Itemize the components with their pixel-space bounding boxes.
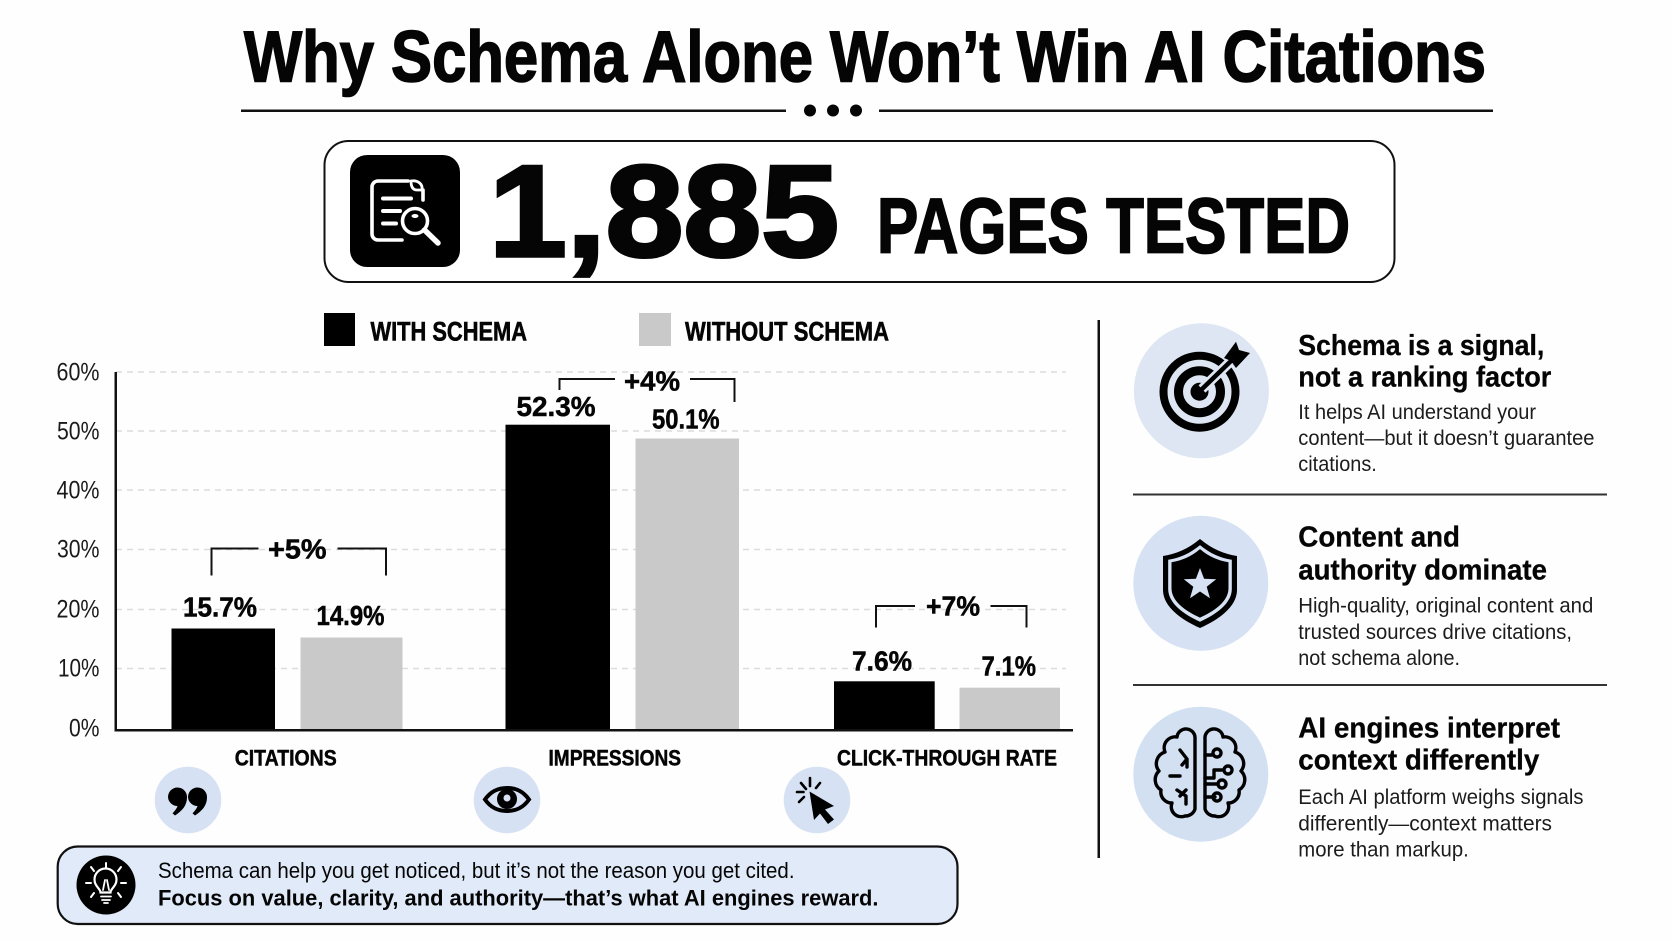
icon: target with arrow [1134,323,1269,458]
group: click-through bars: +7% [926,591,980,622]
takeaway 1: schema is a signal [1134,323,1594,476]
takeaway 2: content and authority: not schema alone. [1298,647,1460,670]
icon: quotation marks [155,767,221,833]
group: citations bars: +5% [268,534,327,564]
callout: takeaway [58,846,957,924]
takeaway 2: content and authority [1133,516,1593,670]
group: click-through bars [834,591,1060,732]
icon: document with magnifier [350,155,460,267]
y axis labels: 10% [58,655,100,683]
icon: eye [474,767,540,833]
takeaway 1: schema is a signal: citations. [1298,453,1377,476]
panel: pages tested banner [324,138,1394,284]
title divider with dots [241,104,1493,116]
icon: brain [1133,707,1268,842]
banner label: PAGES TESTED [877,182,1350,270]
group: citations bars: 14.9% [316,600,385,631]
y axis labels: 60% [56,359,100,387]
chart legend: WITH SCHEMA [370,316,527,346]
big number: 1,885 [489,138,839,284]
category label: click-through rate: CLICK-THROUGH RATE [837,746,1057,770]
panel divider [1098,320,1100,858]
body text: It helps AI understand your [1298,401,1536,424]
heading: Content and [1298,522,1460,554]
icon: cursor click [784,767,850,833]
group: click-through bars: 7.6% [852,646,912,677]
title: Why Schema Alone Won’t Win AI Citations [244,18,1486,98]
body text: Each AI platform weighs signals [1298,786,1584,809]
category label: impressions: IMPRESSIONS [548,746,681,770]
group: citations bars: 15.7% [183,592,257,623]
bar chart [56,359,1073,743]
takeaway 3: ai engines: context differently [1298,744,1539,776]
group: impressions bars: 50.1% [652,403,720,434]
takeaway 1: schema is a signal: content—but it doesn’t guarantee [1298,427,1594,450]
callout text: Schema can help you get noticed, but it’s not the reason you get cited. [158,858,794,883]
icon: light bulb [76,856,136,914]
y axis labels: 50% [57,418,100,446]
group: impressions bars: +4% [624,366,680,397]
chart legend [324,313,889,346]
category label: citations: CITATIONS [235,746,337,770]
callout: takeaway: Focus on value, clarity, and authority—that’s what AI engines reward. [158,886,878,911]
chart legend: WITHOUT SCHEMA [685,316,889,346]
takeaway 1: schema is a signal: not a ranking factor [1298,362,1551,394]
group: click-through bars: 7.1% [982,651,1036,682]
heading: Schema is a signal, [1298,330,1544,362]
takeaway 2: content and authority: authority dominate [1298,554,1547,586]
y axis labels: 40% [56,476,100,504]
icon: shield with star [1133,516,1268,651]
takeaway 2: content and authority: trusted sources drive citations, [1298,621,1572,644]
group: impressions bars: 52.3% [516,391,596,422]
y axis labels: 20% [56,596,100,624]
takeaway 3: ai engines: differently—context matters [1298,813,1552,836]
y axis labels: 30% [57,536,100,564]
y axis labels: 0% [69,715,100,743]
takeaway 3: ai engines [1133,707,1584,862]
takeaway 3: ai engines: more than markup. [1298,839,1469,862]
group: impressions bars [506,366,739,732]
heading: AI engines interpret [1298,713,1560,745]
group: citations bars [172,534,402,732]
body text: High-quality, original content and [1298,595,1593,618]
y axis labels [56,359,100,743]
